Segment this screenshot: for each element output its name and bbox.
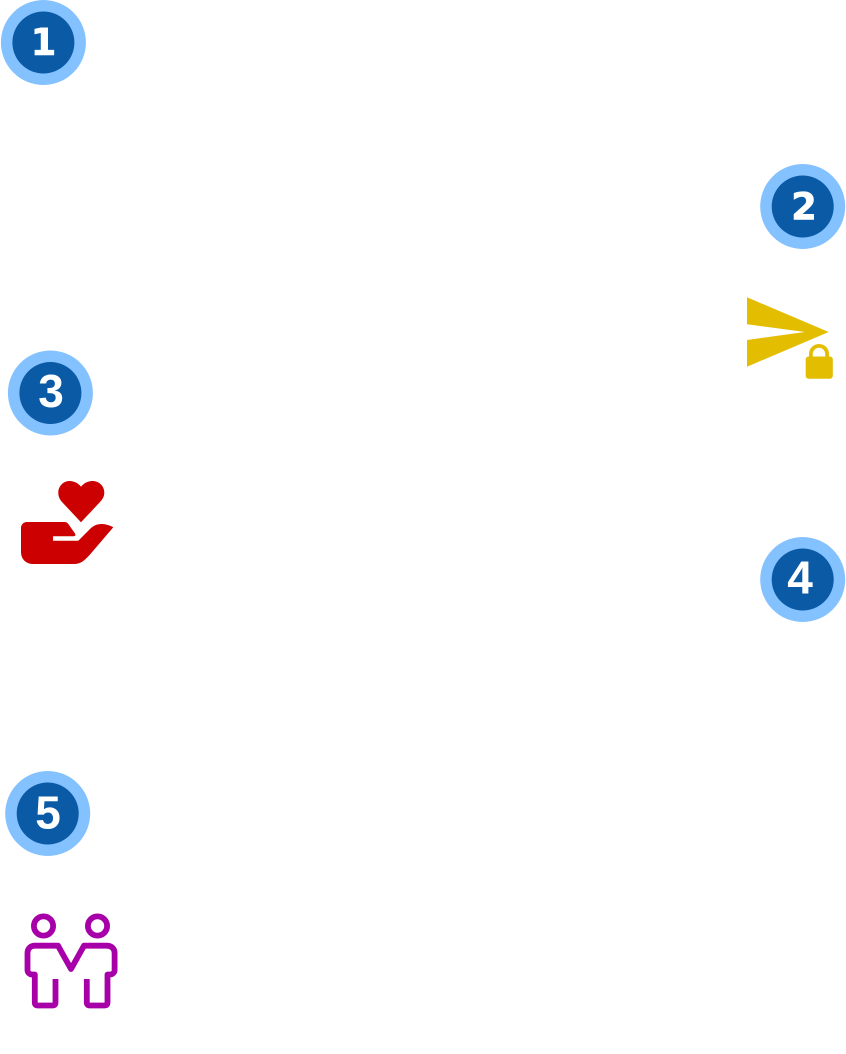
badge 2 bbox=[760, 164, 845, 249]
badge 4 bbox=[760, 537, 845, 622]
badge 1 bbox=[1, 0, 86, 85]
badge 5: 5 bbox=[35, 786, 61, 838]
icon: yellow send arrow with padlock bbox=[747, 297, 833, 379]
badge 4: 4 bbox=[787, 552, 813, 604]
badge 2: 2 bbox=[791, 185, 817, 228]
badge 1: 1 bbox=[31, 21, 56, 64]
icon: purple two people holding hands bbox=[28, 916, 115, 1006]
icon: red hand holding heart bbox=[21, 481, 113, 564]
badge 3: 3 bbox=[38, 365, 64, 417]
badge 3 bbox=[8, 350, 93, 436]
badge 5 bbox=[5, 771, 90, 856]
